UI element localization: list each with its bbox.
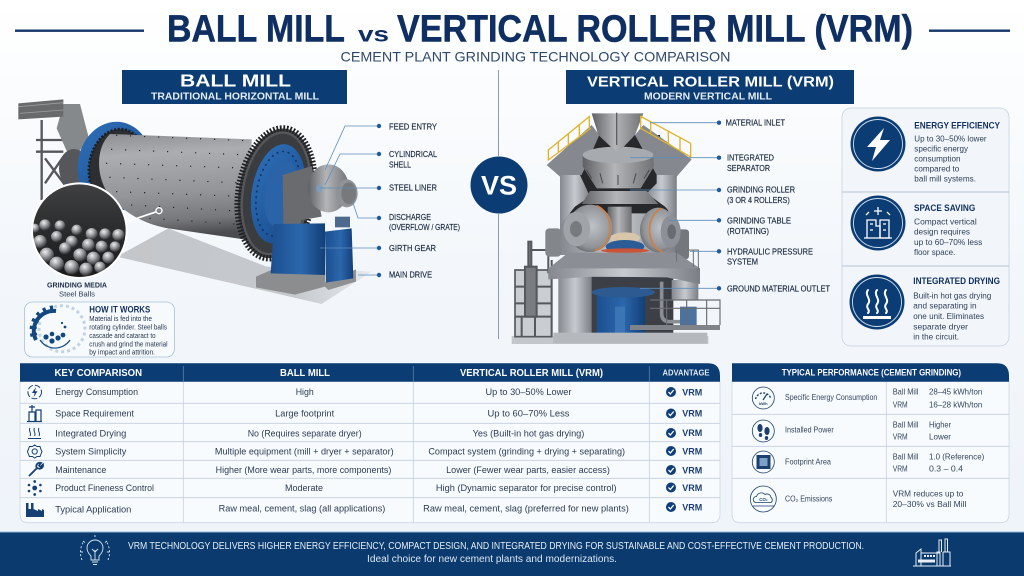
performance metric values: VRM	[893, 400, 908, 410]
column: VRM values: Lower (Fewer wear parts, easier access)	[446, 465, 610, 475]
performance metric labels: CO₂ Emissions	[785, 494, 832, 504]
left grinding roller	[563, 205, 612, 252]
row labels: Product Fineness Control	[55, 483, 154, 493]
benefit: space saving: design requires	[914, 227, 970, 237]
column: VRM values: Compact system (grinding + drying + separating)	[428, 446, 625, 456]
table header row: BALL MILL	[280, 368, 330, 379]
table header row: ADVANTAGE	[662, 368, 710, 378]
icon: lightning bolt	[850, 116, 906, 172]
column: advantage checks: VRM	[682, 388, 702, 398]
panel: how it works: crush and grind the material	[89, 339, 168, 348]
labels: ball mill parts: STEEL LINER	[389, 184, 437, 193]
performance metric values: Ball Mill	[893, 387, 918, 397]
panel: VRM header	[566, 70, 854, 104]
row labels: Energy Consumption	[55, 387, 138, 397]
column: ball mill values: Raw meal, cement, slag (all applications)	[219, 504, 385, 514]
main bearing housing	[283, 164, 358, 225]
labels: ball mill parts: SHELL	[389, 161, 411, 170]
column: advantage checks: VRM	[682, 483, 702, 493]
icon: gear with balls	[33, 306, 85, 352]
row labels: Maintenance	[55, 465, 106, 475]
panel: VRM header: MODERN VERTICAL MILL	[644, 91, 773, 102]
panel: how it works: rotating cylinder. Steel balls	[89, 323, 167, 332]
VS badge with divider	[470, 70, 528, 339]
panel: how it works: HOW IT WORKS	[89, 305, 150, 315]
benefit: integrated drying: and separating in	[913, 300, 977, 310]
panel: VRM benefits	[842, 108, 1009, 346]
benefit: integrated drying: in the circuit.	[913, 331, 959, 341]
benefit: energy efficiency: specific energy	[914, 144, 969, 154]
icon: footprint area	[752, 451, 774, 473]
benefit: energy efficiency: ENERGY EFFICIENCY	[914, 119, 1001, 130]
cylindrical shell	[99, 134, 252, 240]
icon: light bulb	[80, 535, 110, 564]
feed end flange	[73, 118, 157, 215]
performance metric values: 28–45 kWh/ton	[929, 387, 982, 397]
performance header	[732, 363, 1009, 382]
caption: grinding media: Steel Balls	[59, 290, 95, 299]
benefit: space saving: Compact vertical	[914, 217, 977, 227]
labels: ball mill parts: (OVERFLOW / GRATE)	[389, 223, 460, 232]
labels: VRM parts	[726, 119, 830, 294]
feed trunnion	[59, 149, 89, 188]
upper deck and side walls	[547, 125, 692, 223]
performance metric values: 16–28 kWh/ton	[929, 400, 982, 410]
caption: grinding media: GRINDING MEDIA	[47, 280, 107, 289]
row labels: Space Requirement	[55, 408, 134, 418]
benefit: energy efficiency: Up to 30–50% lower	[914, 134, 987, 144]
column: VRM values	[423, 387, 629, 514]
table header row: VERTICAL ROLLER MILL (VRM)	[460, 368, 603, 379]
column: ball mill values: Large footprint	[275, 408, 335, 418]
row labels: Typical Application	[55, 504, 131, 514]
column: advantage checks: VRM	[682, 466, 702, 476]
column: ball mill values	[215, 387, 394, 514]
piping and right platform	[630, 282, 720, 330]
benefit: space saving: floor space.	[914, 247, 955, 257]
column: advantage checks: VRM	[682, 408, 702, 418]
icon: factory	[913, 539, 951, 566]
illustration: ball mill	[18, 99, 372, 304]
column: advantage checks: VRM	[682, 502, 702, 512]
labels: VRM parts: GRINDING ROLLER	[727, 186, 795, 195]
labels: ball mill parts: GIRTH GEAR	[389, 244, 436, 253]
icon: footprints	[752, 420, 774, 442]
subtitle: CEMENT PLANT GRINDING TECHNOLOGY COMPARISON	[340, 50, 730, 64]
labels: ball mill parts: FEED ENTRY	[389, 122, 437, 131]
labels: VRM parts: (ROTATING)	[727, 227, 769, 236]
table header row	[20, 363, 720, 382]
icon: energy gauge: kWh	[759, 401, 768, 406]
performance metric values: 0.3 – 0.4	[929, 463, 963, 473]
panel: VRM header: VERTICAL ROLLER MILL (VRM)	[587, 74, 834, 91]
drive pedestals	[256, 217, 356, 295]
column: advantage checks	[666, 387, 702, 512]
column: ball mill values: Multiple equipment (mill + dryer + separator)	[215, 446, 394, 456]
panel: how it works: by impact and attrition.	[89, 348, 155, 357]
column: advantage checks: VRM	[682, 446, 702, 456]
labels: ball mill parts: MAIN DRIVE	[389, 271, 432, 280]
shell rivets	[107, 135, 250, 225]
table: key comparison	[20, 363, 720, 523]
labels: VRM parts: (3 OR 4 ROLLERS)	[727, 196, 790, 205]
panel: how it works: Material is fed into the	[89, 314, 152, 323]
support legs	[558, 275, 698, 335]
column: VRM values: Up to 30–50% Lower	[486, 387, 572, 397]
labels: VRM parts: MATERIAL INLET	[726, 119, 785, 128]
icon: CO2 cloud: CO₂	[759, 497, 768, 502]
performance metric values: VRM reduces up to	[893, 489, 964, 499]
panel: how it works: cascade and cataract to	[89, 331, 156, 340]
icon: CO2 cloud	[750, 486, 776, 512]
row labels: System Simplicity	[55, 446, 127, 456]
column: advantage checks: VRM	[682, 428, 702, 438]
main deck	[548, 250, 700, 284]
benefit: space saving: SPACE SAVING	[914, 202, 975, 213]
side actuators	[545, 228, 689, 259]
performance metric values: Ball Mill	[893, 451, 918, 461]
shaft	[608, 207, 632, 235]
blue gearbox drive	[592, 287, 655, 337]
benefit: integrated drying: one unit. Eliminates	[913, 311, 984, 321]
VS badge with divider: VS	[481, 170, 517, 200]
column: VRM values: High (Dynamic separator for precise control)	[436, 483, 617, 493]
auxiliary structure left	[515, 242, 552, 337]
panel: how it works	[24, 302, 174, 357]
labels: ball mill parts: CYLINDRICAL	[389, 150, 437, 159]
table header row: KEY COMPARISON	[54, 368, 142, 379]
girth gear	[229, 123, 323, 264]
performance metric values: Ball Mill	[893, 419, 918, 429]
column: VRM values: Up to 60–70% Less	[488, 408, 570, 418]
housing interior	[570, 135, 668, 213]
benefit: integrated drying: separate dryer	[913, 321, 968, 331]
base slab	[553, 333, 707, 343]
icon: compact building	[850, 196, 906, 250]
column: ball mill values: Moderate	[285, 483, 323, 493]
icon: energy gauge	[752, 387, 774, 409]
labels: VRM parts: SYSTEM	[727, 258, 758, 267]
labels: ball mill parts: DISCHARGE	[389, 213, 431, 222]
right grinding roller	[640, 208, 681, 252]
hopper and support frame	[18, 99, 89, 200]
benefit: integrated drying: Built-in hot gas drying	[913, 290, 992, 300]
title: VERTICAL ROLLER MILL (VRM)	[397, 8, 913, 50]
performance metric values: 20–30% vs Ball Mill	[893, 499, 966, 509]
closing message: VRM TECHNOLOGY DELIVERS HIGHER ENERGY EFFICIENCY, COMPACT DESIGN, AND INTEGRATED DRYING FOR SUSTAINABLE AND COST-EFFECTIVE CEMENT PRODUCTION.	[128, 541, 864, 552]
icon: heat waves	[850, 274, 904, 330]
row icons	[26, 385, 44, 517]
row labels: Integrated Drying	[55, 428, 126, 438]
performance metric labels	[785, 392, 877, 504]
benefit: space saving	[850, 196, 982, 257]
performance metric values	[893, 387, 984, 509]
labels: VRM parts: SEPARATOR	[727, 164, 770, 173]
labels: VRM parts: INTEGRATED	[727, 154, 774, 163]
title	[15, 8, 1010, 50]
column: VRM values: Raw meal, cement, slag (preferred for new plants)	[423, 504, 629, 514]
performance metric labels: Specific Energy Consumption	[785, 392, 877, 402]
title: vs	[358, 24, 389, 46]
integrated separator	[582, 147, 658, 204]
inset: grinding media	[30, 182, 130, 282]
column: ball mill values: Higher (More wear parts, more components)	[216, 465, 391, 475]
mill body backing	[560, 175, 677, 255]
performance header: TYPICAL PERFORMANCE (CEMENT GRINDING)	[782, 368, 961, 378]
benefit: energy efficiency: compared to	[914, 164, 959, 174]
labels: ball mill parts	[389, 122, 460, 280]
benefit: energy efficiency	[850, 116, 1001, 184]
performance metric values: Higher	[929, 419, 951, 429]
row labels	[55, 387, 154, 514]
feed hopper	[592, 113, 643, 151]
illustration: vertical roller mill	[512, 113, 720, 344]
column: ball mill values: High	[296, 387, 314, 397]
title: BALL MILL	[167, 8, 345, 50]
callout lines: VRM	[630, 120, 721, 290]
connector from inset to shell	[125, 208, 162, 222]
footer banner: Ideal choice for new cement plants and modernizations.	[367, 554, 617, 565]
panel: ball mill header: BALL MILL	[180, 71, 291, 91]
benefit: space saving: up to 60–70% less	[914, 237, 982, 247]
table: typical performance	[732, 363, 1009, 523]
grinding table	[601, 232, 649, 253]
footer banner	[0, 532, 1024, 576]
panel: ball mill header	[122, 70, 347, 104]
lower frame interior	[590, 277, 673, 333]
callout lines: ball mill	[320, 124, 381, 277]
yellow safety railings	[548, 116, 691, 161]
benefit: integrated drying	[850, 274, 1000, 341]
column: VRM values: Yes (Built-in hot gas drying)	[473, 428, 584, 438]
panel: ball mill header: TRADITIONAL HORIZONTAL MILL	[151, 91, 320, 102]
performance metric labels: Footprint Area	[785, 456, 831, 466]
benefit: energy efficiency: ball mill systems.	[914, 174, 976, 184]
labels: VRM parts: HYDRAULIC PRESSURE	[727, 247, 813, 256]
benefit: integrated drying: INTEGRATED DRYING	[913, 275, 1000, 286]
performance metric labels: Installed Power	[785, 425, 834, 435]
performance metric values: VRM	[893, 463, 908, 473]
column: ball mill values: No (Requires separate dryer)	[248, 428, 362, 438]
performance metric values: VRM	[893, 432, 908, 442]
caption: grinding media	[47, 280, 107, 299]
labels: VRM parts: GROUND MATERIAL OUTLET	[727, 285, 830, 294]
labels: VRM parts: GRINDING TABLE	[727, 216, 791, 225]
performance metric values: 1.0 (Reference)	[929, 451, 984, 461]
performance metric values: Lower	[929, 432, 951, 442]
benefit: energy efficiency: consumption	[914, 154, 961, 164]
